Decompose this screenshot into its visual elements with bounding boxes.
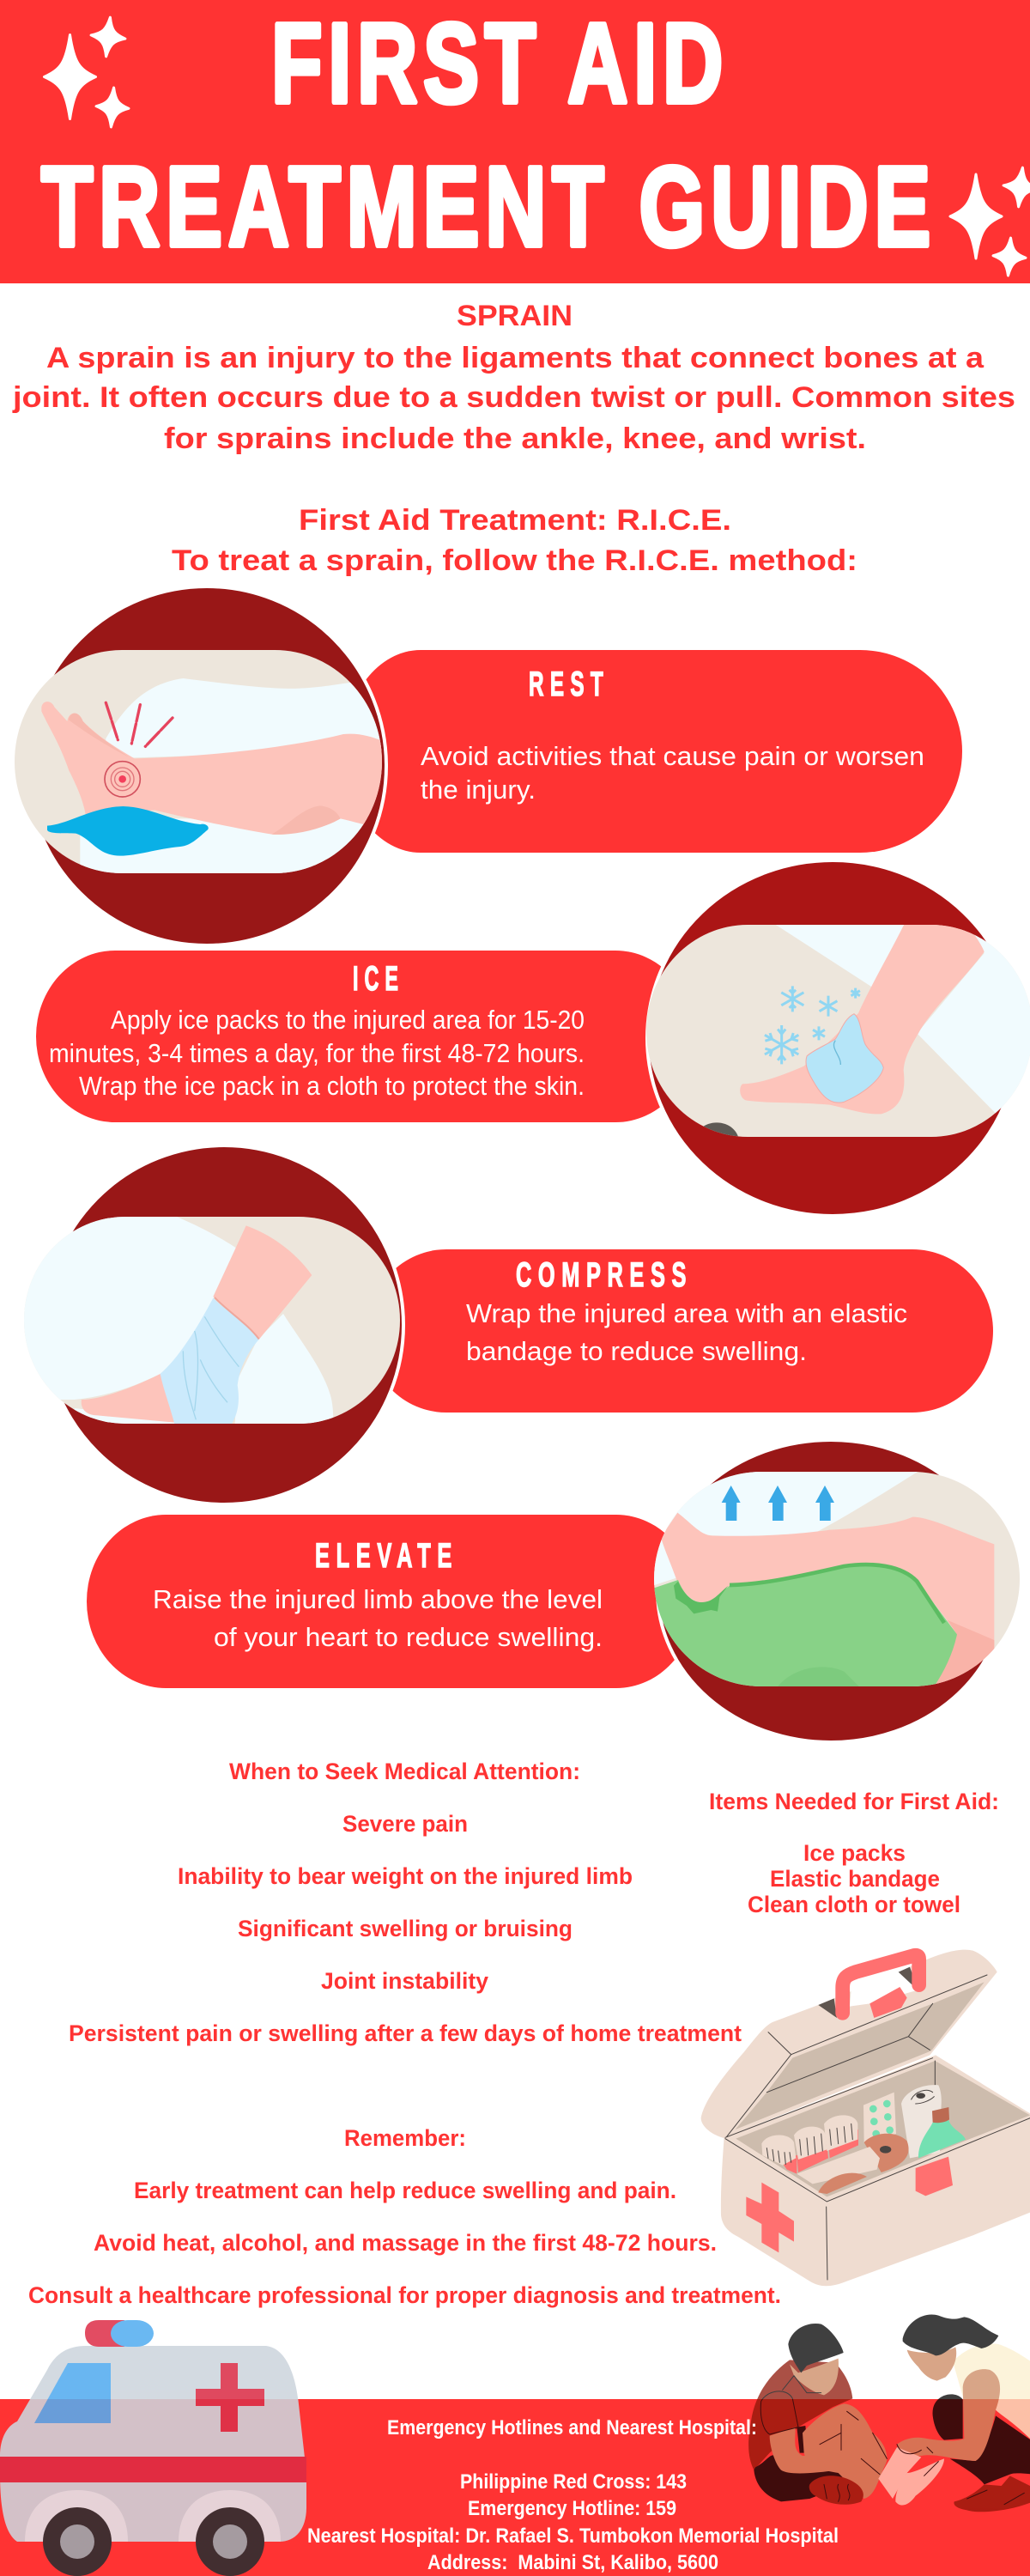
footer band — [0, 2399, 1030, 2576]
text block: remember: Avoid heat, alcohol, and massage in the first 48-72 hours. — [94, 2230, 717, 2256]
rest description: Avoid activities that cause pain or worsen — [421, 741, 924, 771]
ice pill — [36, 951, 694, 1122]
compress description — [466, 1298, 907, 1366]
intro text block: joint. It often occurs due to a sudden twist or pull. Common sites — [12, 381, 1015, 414]
text block: remember: Consult a healthcare professional for proper diagnosis and treatment. — [28, 2282, 781, 2308]
intro text block: for sprains include the ankle, knee, and wrist. — [164, 422, 866, 455]
ice heading: ICE — [353, 960, 404, 998]
elevate dark circle — [657, 1440, 1004, 1742]
text block: remember: Early treatment can help reduce swelling and pain. — [134, 2178, 676, 2203]
rest description — [421, 741, 924, 805]
panel: elevate — [87, 1440, 1030, 1742]
text block: when to seek medical attention: When to Seek Medical Attention: — [229, 1759, 580, 1784]
rest illustration: injured ankle with pain marks — [15, 650, 382, 873]
rest heading: REST — [529, 665, 609, 703]
ice description: minutes, 3-4 times a day, for the first 48-72 hours. — [49, 1038, 585, 1068]
elevate description: Raise the injured limb above the level — [153, 1584, 603, 1614]
text block: remember: Remember: — [344, 2125, 466, 2151]
intro text block — [12, 300, 1015, 577]
panel: rest — [0, 586, 962, 945]
icon: two people bandaging an ankle — [748, 2315, 1030, 2512]
panel: compress — [17, 1145, 993, 1504]
text block: emergency hotlines: Philippine Red Cross: 143 — [460, 2470, 687, 2494]
elevate illustration: leg raised on green pillow — [644, 1468, 1030, 1698]
text block: items needed: Clean cloth or towel — [748, 1892, 960, 1917]
intro text block: SPRAIN — [457, 300, 573, 332]
text block: items needed: Elastic bandage — [770, 1866, 940, 1892]
text block: emergency hotlines: Emergency Hotline: 159 — [468, 2497, 676, 2520]
icon: ambulance — [0, 2320, 306, 2576]
text block: items needed: Items Needed for First Aid: — [709, 1789, 999, 1814]
text block: when to seek medical attention: Persistent pain or swelling after a few days of home treatment — [69, 2020, 742, 2046]
icon: sparkles left — [45, 15, 130, 128]
ice illustration: ice pack on foot — [646, 925, 1030, 1137]
text block: emergency hotlines: Nearest Hospital: Dr. Rafael S. Tumbokon Memorial Hospital — [307, 2524, 839, 2548]
panel: ice — [36, 860, 1030, 1216]
title: FIRST AID — [271, 0, 729, 126]
text block: when to seek medical attention: Joint instability — [321, 1968, 488, 1994]
ice description — [49, 1005, 585, 1101]
text block: when to seek medical attention: Severe pain — [342, 1811, 468, 1837]
header banner — [0, 0, 1030, 283]
compress illustration: bandaged ankle — [24, 1217, 400, 1424]
title — [41, 0, 936, 270]
ice dark circle — [647, 860, 1018, 1216]
rest pill — [343, 650, 962, 853]
ice description: Wrap the ice pack in a cloth to protect the skin. — [79, 1071, 585, 1101]
elevate pill — [87, 1515, 695, 1688]
text block: items needed: Ice packs — [803, 1840, 906, 1866]
compress dark circle — [45, 1145, 403, 1504]
rest description: the injury. — [421, 775, 536, 805]
intro text block: First Aid Treatment: R.I.C.E. — [299, 504, 731, 537]
icon: first aid kit — [701, 1950, 1030, 2286]
text block: remember — [28, 2125, 781, 2308]
rest dark circle — [27, 586, 386, 945]
text block: when to seek medical attention: Significant swelling or bruising — [238, 1916, 573, 1941]
text block: when to seek medical attention: Inability to bear weight on the injured limb — [178, 1863, 633, 1889]
ice description: Apply ice packs to the injured area for 15-20 — [111, 1005, 585, 1035]
elevate description — [153, 1584, 603, 1652]
intro text block: To treat a sprain, follow the R.I.C.E. method: — [172, 544, 857, 577]
text block: emergency hotlines: Emergency Hotlines and Nearest Hospital: — [387, 2416, 757, 2439]
compress pill — [367, 1249, 993, 1413]
text block: emergency hotlines — [307, 2416, 839, 2574]
compress description: Wrap the injured area with an elastic — [466, 1298, 907, 1328]
text block: when to seek medical attention — [69, 1759, 742, 2046]
intro text block: A sprain is an injury to the ligaments that connect bones at a — [46, 342, 985, 374]
text block: emergency hotlines: Address: Mabini St, Kalibo, 5600 — [427, 2551, 718, 2574]
icon: sparkles right — [950, 166, 1030, 276]
compress heading: COMPRESS — [516, 1256, 693, 1294]
elevate heading: ELEVATE — [315, 1537, 458, 1575]
elevate description: of your heart to reduce swelling. — [214, 1622, 603, 1652]
text block: items needed — [709, 1789, 999, 1917]
compress description: bandage to reduce swelling. — [466, 1336, 807, 1366]
